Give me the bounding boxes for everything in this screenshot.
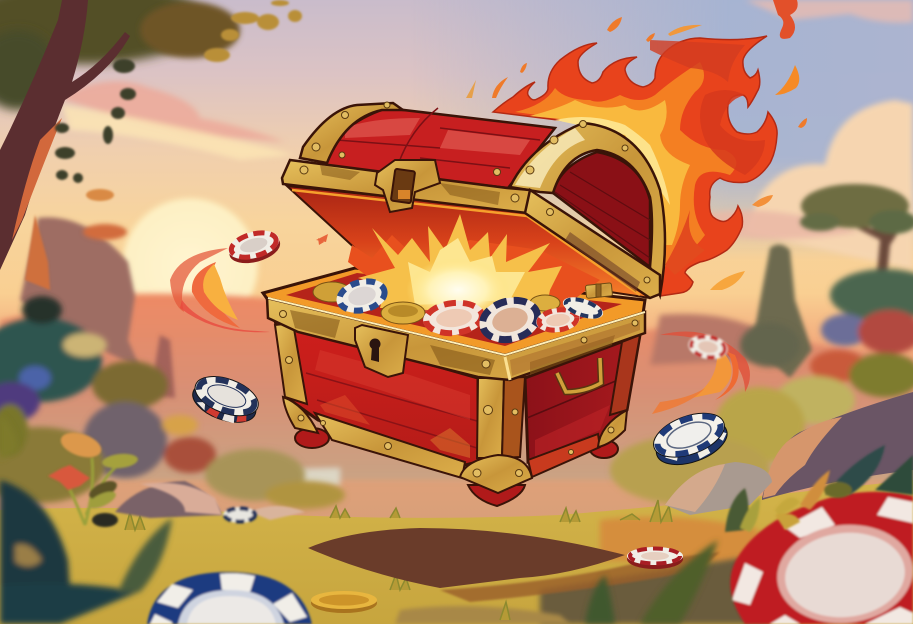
chest: lid gold trim bbox=[282, 103, 665, 298]
chest: lid end cap bbox=[553, 152, 650, 267]
foreground leaves bbox=[0, 415, 718, 624]
chest: lid hasp bbox=[375, 160, 440, 212]
flame embers bbox=[316, 0, 807, 290]
sun bbox=[118, 194, 262, 338]
chest: right wall bbox=[525, 335, 640, 462]
rocks bbox=[115, 392, 913, 520]
left tree bbox=[0, 0, 302, 290]
leaves: dark sprigs bbox=[55, 59, 136, 183]
grass tufts bbox=[125, 500, 672, 620]
chest bbox=[263, 102, 665, 506]
gold coin on ground bbox=[311, 591, 377, 613]
distant tree spire bbox=[150, 335, 175, 398]
flame swirl left bbox=[170, 248, 270, 332]
right foliage bbox=[610, 269, 913, 505]
chest: rim gold band bbox=[267, 298, 645, 380]
foreground chip: large red bbox=[730, 492, 913, 624]
chest: feet bbox=[295, 428, 618, 506]
chips inside chest bbox=[313, 274, 606, 349]
leaves: golden bbox=[204, 0, 302, 62]
foreground chip: navy bottom bbox=[147, 572, 312, 624]
left foliage bbox=[0, 296, 345, 509]
chest: lid underside bbox=[287, 186, 650, 298]
chest: lid top red bbox=[322, 108, 555, 188]
flowers bbox=[48, 428, 139, 527]
chest: hinge bbox=[585, 283, 613, 298]
shadow under the chest bbox=[308, 528, 625, 588]
poker chip: flying red left bbox=[225, 226, 283, 268]
big flame behind lid bbox=[493, 36, 777, 296]
chest: front wall bbox=[275, 320, 478, 465]
chest: front lock plate bbox=[355, 325, 408, 377]
poker chip: red right bbox=[686, 332, 730, 362]
chest: interior rim bbox=[263, 268, 645, 357]
right rock spire bbox=[752, 244, 812, 378]
poker chip: navy right bbox=[648, 405, 733, 473]
ground meadow bbox=[0, 480, 913, 624]
chest: gold trim bbox=[275, 323, 640, 493]
flame swirl right bbox=[652, 332, 750, 414]
poker chip: red on ground bbox=[627, 547, 683, 569]
poker chip: small on ground bbox=[223, 507, 257, 523]
left cliff bbox=[20, 217, 140, 368]
mid foliage right bbox=[725, 445, 913, 532]
right tree bbox=[800, 184, 913, 295]
chest: side handle bbox=[557, 358, 601, 392]
poker chip: navy left bbox=[187, 369, 264, 430]
distant hills bbox=[0, 294, 913, 486]
chest: fire burst bbox=[348, 214, 600, 322]
clouds bbox=[62, 0, 913, 270]
chest: rivets bbox=[280, 102, 650, 477]
